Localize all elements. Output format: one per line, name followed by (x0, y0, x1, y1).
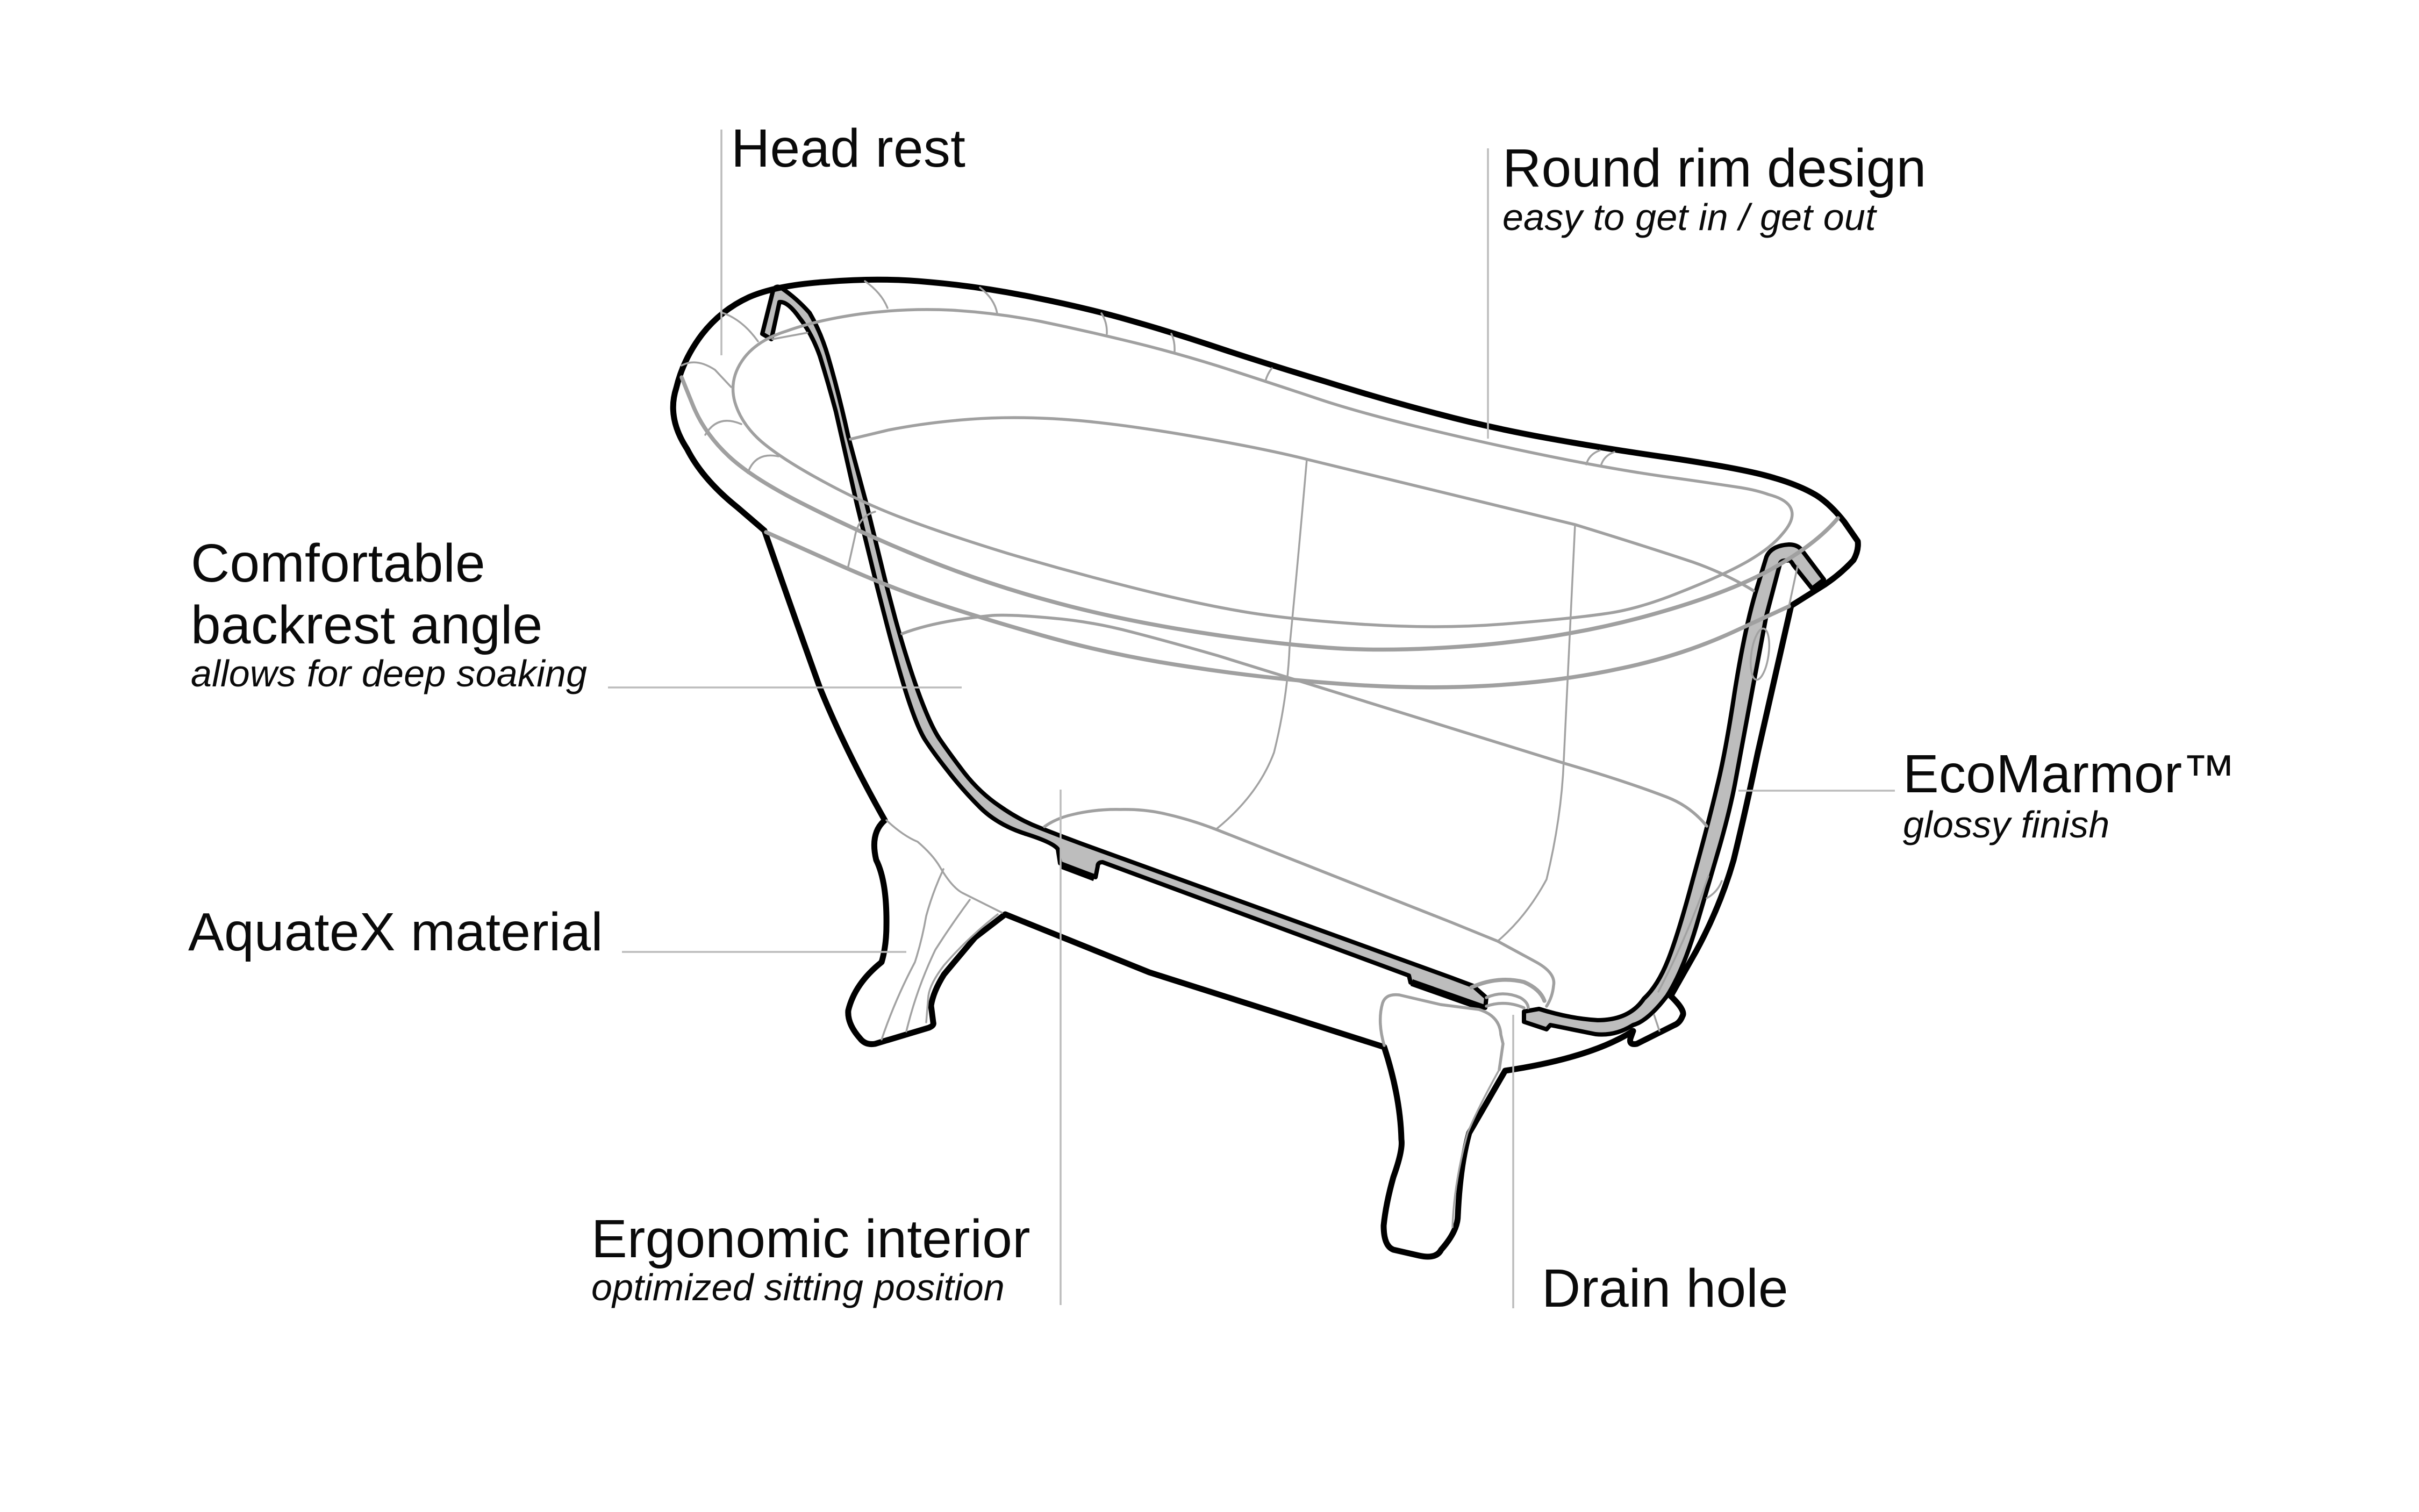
label: ergonomic interior (591, 1209, 1030, 1308)
label: ergonomic interior: optimized sitting position (591, 1266, 1005, 1308)
label: EcoMarmor (1903, 744, 2236, 845)
bathtub illustration (673, 280, 1858, 1257)
label: AquateX material: AquateX material (188, 902, 603, 962)
label: comfortable backrest angle (191, 533, 587, 694)
drain hole (1471, 980, 1544, 1008)
shell cross-section: right wall (1524, 544, 1824, 1035)
front foot contour (1380, 995, 1503, 1227)
label: comfortable backrest angle: backrest angle (191, 595, 543, 655)
shell cross-section: back and floor (762, 286, 1486, 1008)
label: comfortable backrest angle: allows for deep soaking (191, 653, 587, 694)
label: EcoMarmor: EcoMarmor™ (1903, 744, 2236, 804)
label: EcoMarmor: glossy finish (1903, 804, 2110, 845)
rim ribs (682, 281, 1614, 569)
leader line: backrest (608, 686, 962, 689)
leader line: head rest (720, 130, 722, 355)
outer tub outline (673, 280, 1858, 1257)
label: head rest: Head rest (731, 118, 965, 178)
leader line: round rim (1487, 148, 1489, 439)
back foot and right wall details (1654, 566, 1798, 1031)
left foot contour (882, 820, 1002, 1040)
label: round rim design (1502, 138, 1927, 238)
leader line: AquateX (622, 951, 906, 953)
label: round rim design: easy to get in / get out (1502, 196, 1877, 238)
rim contours (682, 310, 1838, 687)
interior contours (850, 418, 1754, 1006)
label: ergonomic interior: Ergonomic interior (591, 1209, 1030, 1269)
leader line: drain hole (1512, 1015, 1514, 1308)
label: comfortable backrest angle: Comfortable (191, 533, 485, 593)
leader line: ergonomic interior (1060, 790, 1062, 1305)
leader line: EcoMarmor (1738, 790, 1895, 792)
thick shell end marks (1062, 865, 1485, 1008)
label: drain hole: Drain hole (1542, 1258, 1788, 1318)
label: round rim design: Round rim design (1502, 138, 1927, 198)
